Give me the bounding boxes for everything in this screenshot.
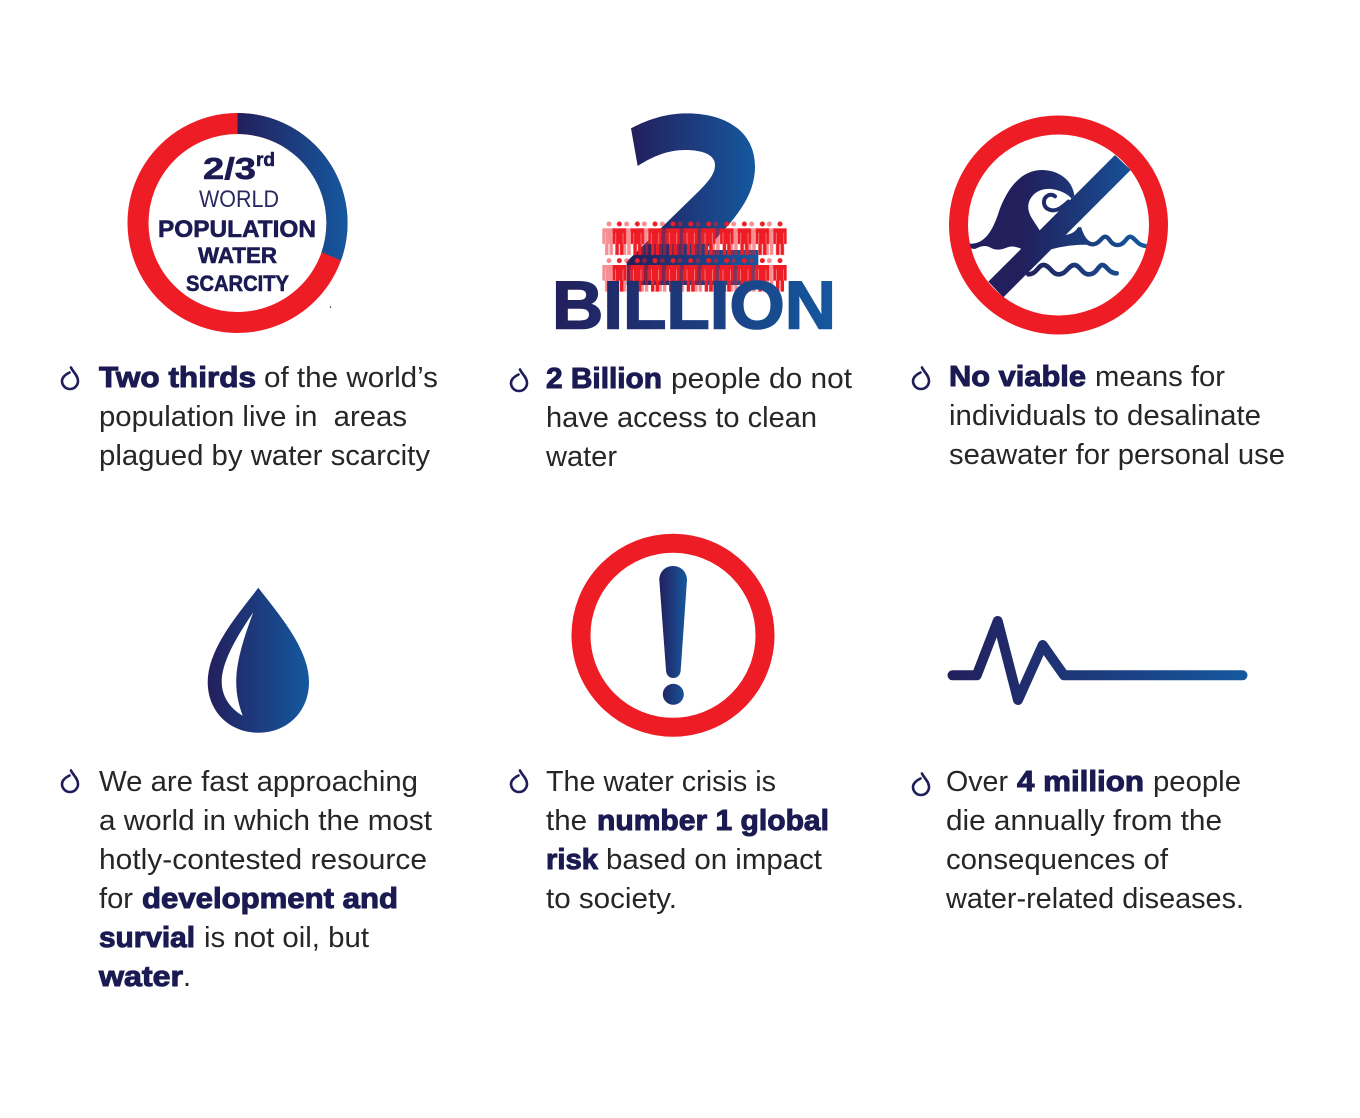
panel: two billion (511, 113, 852, 473)
text block: four million: consequences of (946, 844, 1169, 876)
icon: no-water prohibition sign (958, 125, 1158, 325)
text block: two thirds (99, 362, 438, 472)
text block: contested resource: is not oil, but (204, 922, 369, 954)
text block: contested resource (98, 766, 432, 993)
text block: contested resource: hotly-contested resource (99, 844, 427, 876)
text block: four million: 4 million (1017, 766, 1144, 798)
text block: global risk: based on impact (606, 844, 822, 876)
text block: contested resource: . (183, 961, 191, 993)
text block: two billion: have access to clean (546, 402, 817, 434)
icon: two-thirds ring: 2/3 (203, 151, 256, 186)
bullet drop (511, 370, 527, 391)
text block: contested resource: for (99, 883, 133, 915)
text block: contested resource: We are fast approaching (99, 766, 418, 798)
text block: no viable: seawater for personal use (949, 439, 1285, 471)
text block: contested resource: survial (99, 922, 195, 954)
text block: four million (945, 766, 1244, 915)
text block: two thirds: plagued by water scarcity (99, 440, 430, 472)
icon: water drop (208, 588, 309, 733)
icon: two-thirds ring: WATER (198, 243, 277, 268)
icon: two-thirds ring: SCARCITY (186, 271, 289, 296)
panel: no viable desalination (913, 125, 1285, 471)
panel: four million (913, 621, 1244, 915)
text block: contested resource: development and (142, 883, 398, 915)
text block: global risk: to society. (546, 883, 677, 915)
text block: contested resource: a world in which the most (99, 805, 432, 837)
icon: two-thirds ring: rd (256, 150, 275, 171)
text block: global risk: number 1 global (597, 805, 829, 837)
panel: two thirds (62, 113, 438, 472)
bullet drop (62, 770, 78, 792)
icon: exclamation sign (581, 543, 765, 727)
text block: four million: water-related diseases. (945, 883, 1244, 915)
icon: flatline pulse (952, 621, 1242, 700)
text block: four million: Over (946, 766, 1008, 798)
text block: two thirds: Two thirds (99, 362, 256, 394)
icon: two-thirds ring (138, 113, 348, 322)
text block: no viable (949, 361, 1285, 471)
text block: two billion: people do not (671, 363, 852, 395)
bullet drop (62, 368, 78, 389)
panel: global risk (511, 543, 829, 915)
text block: no viable: means for (1095, 361, 1225, 393)
text block: two thirds: population live in areas (99, 401, 407, 433)
bullet drop (511, 770, 527, 792)
text block: global risk: The water crisis is (546, 766, 776, 798)
bullet drop (913, 368, 929, 389)
icon: big 2 with people and BILLION: BILLION (552, 268, 836, 344)
icon: two-thirds ring: POPULATION (158, 216, 316, 243)
text block: no viable: individuals to desalinate (949, 400, 1261, 432)
text block: four million: die annually from the (946, 805, 1222, 837)
text block: two billion (545, 363, 852, 473)
text block: two billion: 2 Billion (546, 363, 662, 395)
text block: global risk: the (546, 805, 587, 837)
icon: two-thirds ring: WORLD (199, 186, 279, 213)
text block: global risk (546, 766, 829, 915)
text block: two thirds: of the world’s (264, 362, 438, 394)
text block: four million: people (1153, 766, 1241, 798)
panel: contested resource (62, 588, 432, 993)
text block: contested resource: water (98, 961, 183, 993)
text block: no viable: No viable (949, 361, 1086, 393)
icon: big 2 with people and BILLION (552, 113, 836, 344)
bullet drop (913, 774, 929, 795)
text block: global risk: risk (546, 844, 599, 876)
text block: two billion: water (545, 441, 617, 473)
